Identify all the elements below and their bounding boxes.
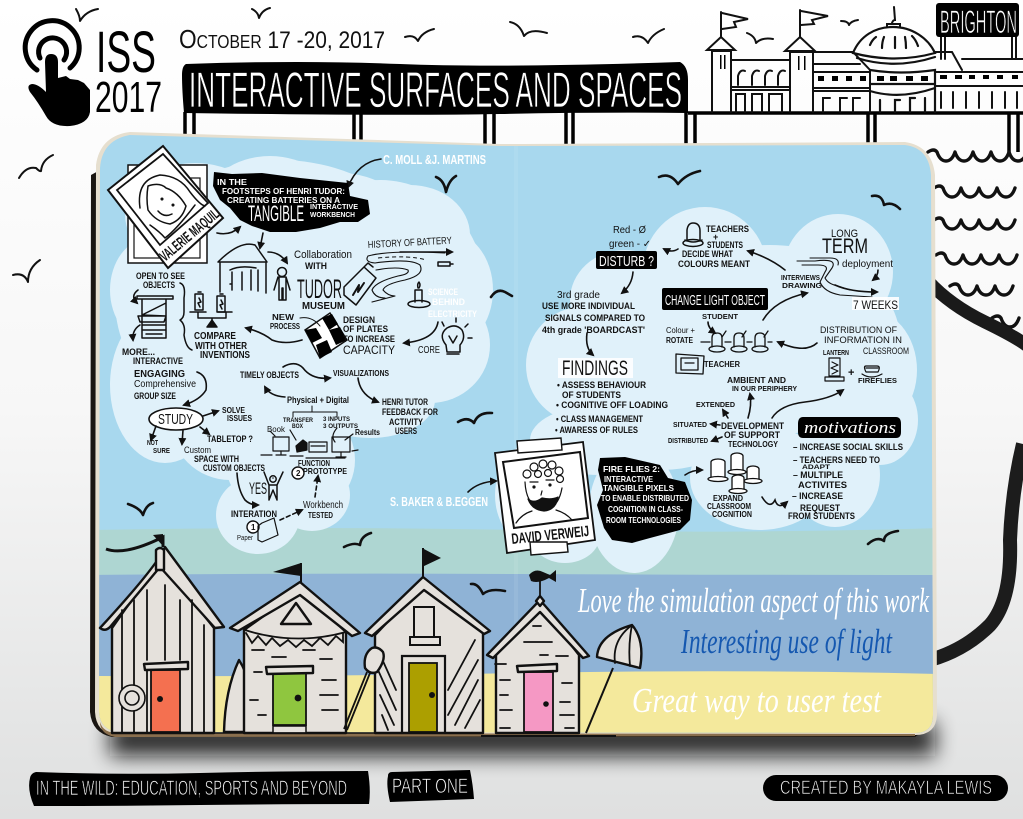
findings list: • COGNITIVE OFF LOADING [556, 400, 668, 410]
photo: Valerie Maquil [108, 146, 223, 268]
title blob: In the footsteps of Henri Tudor: FOOTSTEPS OF HENRI TUDOR: [222, 187, 345, 196]
text: design of plates: TO INCREASE [343, 334, 395, 344]
text: study branches: NOT [147, 440, 159, 447]
text: Henri Tutor feedback: ACTIVITY [389, 417, 423, 427]
box: motivations [798, 417, 901, 438]
icon: checkered plates [305, 313, 347, 358]
beach hut 4: pink door [487, 570, 589, 733]
photo: David Verweij: DAVID VERWEIJ [511, 523, 590, 548]
text: function prototype: PROTOTYPE [303, 466, 347, 476]
text: science behind electricity [428, 287, 477, 319]
icons: lantern and fireflies cup [825, 358, 897, 385]
notebook [90, 130, 940, 740]
development of support technology: DEVELOPMENT [721, 421, 784, 432]
motivations list: – INCREASE SOCIAL SKILLS [793, 442, 903, 452]
development of support technology: TECHNOLOGY [728, 439, 778, 449]
text: teachers and students decide: STUDENTS [707, 240, 743, 250]
icon: battery [344, 263, 376, 305]
notebook shadow [110, 722, 935, 756]
text: science behind electricity: ELECTRICITY [428, 309, 477, 319]
long term deployment: deployment [842, 259, 893, 270]
text: ambient and peripheral: IN OUR PERIPHERY [732, 384, 797, 393]
road: history of battery [367, 236, 453, 302]
text: teachers and students decide: + [713, 232, 718, 242]
text: workbench tested: Workbench [303, 500, 343, 511]
development of support technology: DISTRIBUTED [668, 436, 708, 445]
text: function prototype: FUNCTION [298, 459, 330, 468]
ground line [115, 732, 481, 734]
icon: balance scale with batteries [190, 292, 232, 327]
text: teachers and students decide: COLOURS MEANT [678, 259, 750, 269]
text: more interactive engaging comprehensive group size: INTERACTIVE [133, 356, 183, 366]
text: third grade signals: 3rd grade [557, 290, 600, 301]
text: timely objects and visualizations [240, 364, 389, 402]
text: workbench tested: TESTED [308, 511, 333, 520]
callout: S. Baker and B. Eggen [390, 481, 496, 509]
long term deployment: LONG [831, 228, 858, 240]
comment: great way to user test: Great way to user test [632, 681, 882, 720]
text: open to see objects [136, 271, 192, 350]
icon: light bulb and core: CORE [418, 345, 440, 356]
text: open to see objects: OBJECTS [143, 280, 175, 290]
logo: touch hand [25, 21, 90, 126]
arrows from photo and title [217, 227, 287, 263]
title blob: In the footsteps of Henri Tudor: INTERACTIVE [310, 204, 358, 211]
text: distribution of information [778, 325, 909, 357]
study bubble [149, 408, 218, 444]
text: teachers and students decide: TEACHERS [706, 224, 749, 234]
firefly blob: TO ENABLE DISTRIBUTED [601, 493, 689, 503]
text: teachers and students decide: DECIDE WHAT [682, 249, 733, 259]
text: study branches: Custom [184, 445, 211, 455]
study bubble: STUDY [158, 411, 193, 428]
text: collaboration with Tudor Museum: TUDOR [297, 274, 342, 304]
icon: person [274, 268, 290, 300]
long term deployment: TERM [822, 235, 868, 258]
icon: candle [408, 282, 430, 308]
text: expand classroom cognition [707, 494, 787, 519]
text: distribution of information: LANTERN [823, 348, 849, 357]
logo text: ISS 2017 [95, 20, 162, 122]
portrait sketch [516, 460, 572, 523]
sign: Brighton [936, 3, 1019, 59]
firefly blob: INTERACTIVE [604, 474, 653, 484]
right cloud [495, 207, 918, 573]
text: compare with other inventions: WITH OTHER [195, 341, 248, 352]
beach hut 2: green door [230, 563, 360, 733]
road: history of battery: HISTORY OF BATTERY [368, 236, 452, 251]
logo text: ISS 2017: 2017 [95, 73, 162, 122]
title blob: In the footsteps of Henri Tudor: TANGIBLE [248, 201, 304, 226]
text: distribution of information: DISTRIBUTION OF [820, 325, 897, 335]
text: function prototype [292, 459, 347, 479]
motivations list: FROM STUDENTS [788, 511, 855, 521]
diagram: physical plus digital setup: TRANSFER [283, 417, 313, 424]
callout: C. Moll and J. Martins [348, 152, 486, 187]
title blob: In the footsteps of Henri Tudor: IN THE [217, 178, 248, 187]
comment: interesting use of light: Interesting use of light [680, 622, 893, 661]
box: change light object [662, 288, 807, 320]
text: new process [246, 313, 320, 342]
text: iteration paper: INTERATION [231, 509, 277, 519]
umbrella [481, 625, 641, 736]
development of support technology [668, 390, 843, 449]
title banner [182, 62, 688, 118]
development of support technology: SITUATED [673, 420, 708, 429]
text: design of plates: OF PLATES [343, 324, 388, 334]
text: third grade signals: USE MORE INDIVIDUAL [542, 301, 635, 311]
motivations list: ACTIVITES [798, 480, 847, 490]
text: collaboration with Tudor Museum: MUSEUM [302, 301, 345, 312]
motivations list: – MULTIPLE [793, 470, 843, 480]
label: in the wild: IN THE WILD: EDUCATION, SPORTS AND BEYOND [36, 777, 347, 800]
text: study branches: CUSTOM OBJECTS [203, 463, 265, 473]
birds over the sketch [128, 171, 900, 594]
callout: C. Moll and J. Martins: C. MOLL &J. MARTINS [383, 152, 486, 167]
text: design of plates: CAPACITY [343, 343, 395, 357]
diagram: physical plus digital setup: 3 OUTPUTS [323, 423, 359, 430]
paddle [344, 648, 384, 730]
label: part one [387, 770, 474, 802]
text: study branches: TABLETOP ? [207, 434, 253, 444]
icons: lantern and fireflies cup: FIREFLIES [858, 376, 897, 385]
findings list [555, 380, 668, 435]
text: compare with other inventions [194, 331, 250, 361]
firefly blob: TANGIBLE PIXELS [603, 483, 674, 493]
text: expand classroom cognition: EXPAND [713, 494, 743, 503]
diagram: physical plus digital setup: BOX [292, 423, 304, 430]
development of support technology: EXTENDED [696, 400, 736, 409]
notebook cover edge [90, 170, 925, 737]
text: workbench tested [303, 476, 343, 520]
text: distribution of information: INFORMATION IN [824, 335, 902, 345]
text: teachers and students decide [678, 224, 785, 270]
text: expand classroom cognition: CLASSROOM [707, 502, 751, 511]
text: study branches: SPACE WITH [194, 454, 239, 464]
text: design of plates [343, 315, 395, 357]
text: Henri Tutor feedback: HENRI TUTOR [382, 397, 428, 407]
icon: lamp [683, 223, 703, 246]
label: in the wild [29, 771, 370, 806]
birds in the white margin [13, 8, 858, 282]
diagram: physical plus digital setup: 3 INPUTS [323, 416, 351, 423]
text: science behind electricity: BEHIND [432, 297, 465, 307]
motivations list: – INCREASE [792, 491, 843, 501]
text: distribution of information: CLASSROOM [863, 346, 909, 356]
motivations list: – TEACHERS NEED TO [793, 455, 880, 465]
portrait sketch [139, 175, 205, 238]
icon: four cylinders [708, 453, 762, 494]
photo: David Verweij [495, 438, 595, 555]
icon: light bulb and core [404, 318, 472, 356]
text: open to see objects: OPEN TO SEE [136, 271, 185, 281]
diagram: student lamps and teacher: Colour + [666, 326, 695, 335]
text: timely objects and visualizations: TIMELY OBJECTS [240, 370, 299, 380]
diagram: student lamps and teacher: ROTATE [666, 336, 694, 345]
diagram: physical plus digital setup [261, 395, 380, 458]
motivations list: ADAPT [802, 464, 830, 471]
text: Henri Tutor feedback: FEEDBACK FOR [382, 407, 438, 417]
text: Henri Tutor feedback [382, 397, 438, 436]
photo: Valerie Maquil: VALERIE MAQUIL [157, 206, 223, 265]
label: part one: PART ONE [392, 775, 468, 798]
text: function prototype: 2 [296, 469, 301, 478]
text: third grade signals: SIGNALS COMPARED TO [545, 313, 645, 323]
diagram: physical plus digital setup: Book [267, 425, 286, 434]
elastic band [928, 281, 1023, 660]
text: new process: NEW [272, 313, 295, 322]
text: more interactive engaging comprehensive group size: MORE... [122, 347, 155, 357]
callout: S. Baker and B. Eggen: S. BAKER & B.EGGEN [390, 494, 488, 509]
findings list: • AWARESS OF RULES [555, 425, 638, 435]
box: disturb: DISTURB ? [599, 253, 654, 270]
pier legs [185, 112, 1018, 152]
text: compare with other inventions: INVENTIONS [200, 350, 250, 361]
long term deployment [781, 228, 899, 312]
motivations list: REQUEST [800, 503, 840, 513]
diagram: student lamps and teacher [666, 312, 772, 374]
text: timely objects and visualizations: VISUALIZATIONS [333, 368, 389, 378]
building: Brighton pier pavilion [688, 7, 1023, 113]
title blob: In the footsteps of Henri Tudor [213, 172, 370, 232]
text: new process: PROCESS [270, 322, 301, 331]
findings heading: FINDINGS [562, 357, 628, 380]
firefly blob [597, 457, 702, 543]
firefly blob: COGNITION IN CLASS- [608, 504, 683, 514]
icon: workbench box [133, 290, 173, 340]
text: compare with other inventions: COMPARE [194, 331, 236, 342]
long term deployment: 7 WEEKS [853, 298, 898, 312]
text: more interactive engaging comprehensive group size: Comprehensive [134, 379, 196, 390]
development of support technology: OF SUPPORT [724, 430, 780, 441]
long term deployment: DRAWING [782, 281, 822, 290]
text: third grade signals [542, 272, 645, 355]
title blob: In the footsteps of Henri Tudor: WORKBENCH [310, 212, 355, 219]
text: red green: Red - Ø [613, 225, 646, 236]
motivations list [788, 442, 903, 521]
surfboard [224, 660, 254, 732]
waves pattern [928, 150, 1023, 327]
findings list: • CLASS MANAGEMENT [556, 414, 643, 424]
text: more interactive engaging comprehensive group size: GROUP SIZE [134, 391, 176, 401]
text: study branches: SOLVE [222, 406, 246, 415]
text: more interactive engaging comprehensive group size: ENGAGING [134, 369, 185, 380]
text: iteration paper [231, 509, 302, 542]
findings list: OF STUDENTS [562, 390, 621, 400]
findings heading [558, 357, 633, 380]
box: motivations: motivations [804, 418, 896, 437]
box: change light object: CHANGE LIGHT OBJECT [665, 292, 765, 309]
text: collaboration with Tudor Museum [294, 249, 352, 312]
icons: lantern and fireflies cup: + [848, 367, 854, 379]
text: collaboration with Tudor Museum: Collaboration [294, 249, 352, 261]
text: design of plates: DESIGN [343, 315, 375, 325]
notebook page edge [95, 132, 937, 736]
date: OCTOBER 17 -20, 2017 [179, 24, 385, 54]
text: iteration paper: 1 [251, 523, 256, 532]
text: iteration paper: Paper [237, 535, 254, 542]
text: Henri Tutor feedback: USERS [395, 426, 417, 436]
yes figure: YES [249, 479, 267, 498]
diagram: physical plus digital setup: Results [355, 428, 380, 437]
diagram: student lamps and teacher: STUDENT [702, 312, 738, 321]
diagram: physical plus digital setup: Physical + Digital [287, 395, 349, 405]
beach hut 3: olive door [365, 548, 490, 733]
findings list: • ASSESS BEHAVIOUR [557, 380, 646, 390]
text: collaboration with Tudor Museum: WITH [305, 261, 327, 271]
firefly blob: FIRE FLIES 2: [603, 464, 660, 474]
logo text: ISS 2017: ISS [96, 20, 156, 85]
long term deployment: INTERVIEWS [781, 273, 820, 282]
text: ambient and peripheral: AMBIENT AND [727, 376, 786, 385]
text: study branches: ISSUES [227, 414, 253, 423]
text: science behind electricity: SCIENCE [428, 287, 458, 297]
left cloud [110, 156, 493, 554]
text: expand classroom cognition: COGNITION [712, 510, 752, 519]
text: third grade signals: 4th grade 'BOARDCAST' [542, 325, 645, 335]
text: study branches [147, 406, 265, 473]
text: ambient and peripheral [727, 376, 797, 393]
beach hut 1: orange door [100, 534, 224, 733]
title blob: In the footsteps of Henri Tudor: CREATING BATTERIES ON A [227, 196, 340, 205]
bottom page edge [100, 722, 915, 737]
yes figure [237, 472, 283, 505]
text: study branches: SURE [153, 448, 170, 455]
painted page bands [90, 130, 940, 740]
text: more interactive engaging comprehensive group size [122, 347, 206, 405]
text: red green [609, 225, 651, 250]
firefly blob: ROOM TECHNOLOGIES [606, 515, 681, 525]
diagram: student lamps and teacher: TEACHER [704, 360, 740, 369]
text: red green: green - ✓ [609, 239, 651, 250]
icon: museum temple [218, 244, 267, 293]
